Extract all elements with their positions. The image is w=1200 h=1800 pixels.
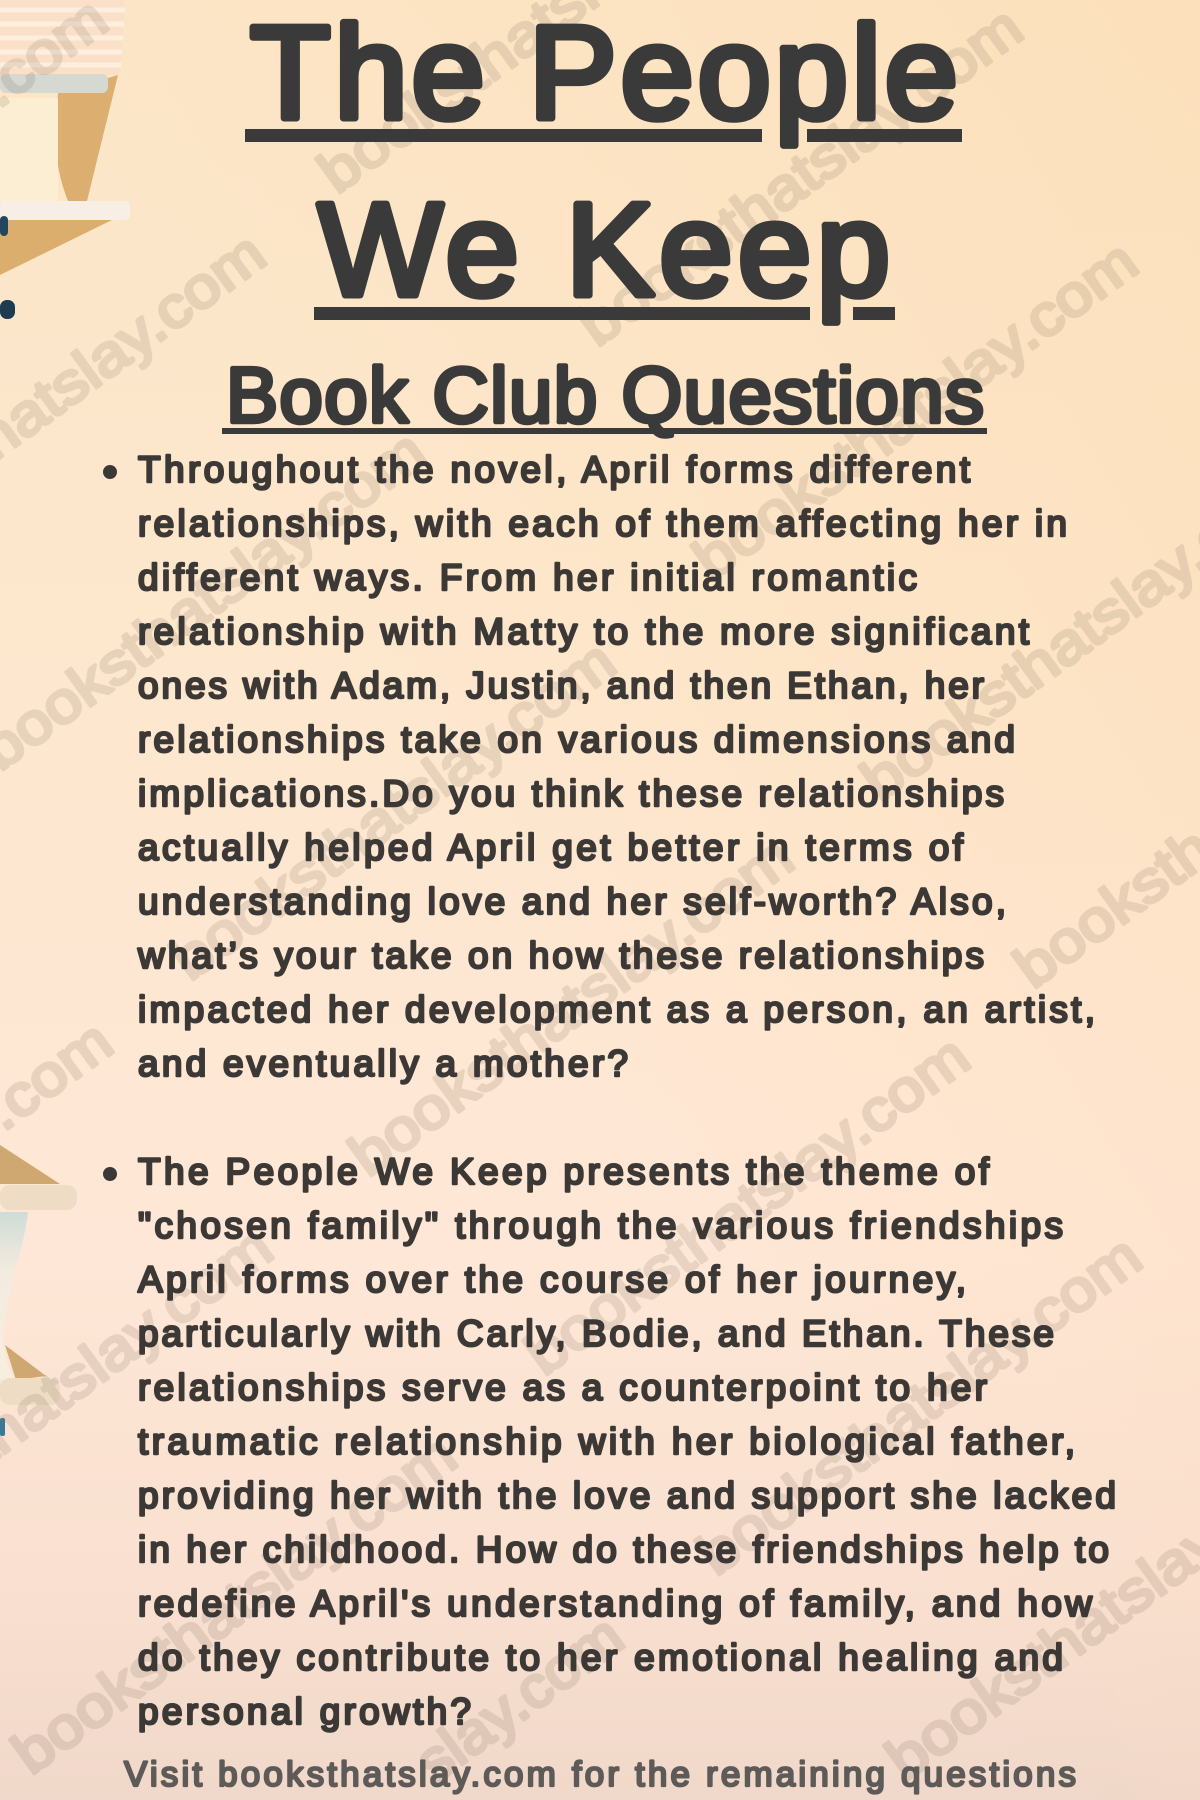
question 1 text: ones with Adam, Justin, and then Ethan, her bbox=[138, 665, 984, 706]
question 2 text: relationships serve as a counterpoint to her bbox=[138, 1367, 987, 1408]
question 1 text: relationships take on various dimensions and bbox=[138, 719, 1015, 760]
bullet bbox=[103, 1167, 117, 1181]
subtitle bbox=[222, 351, 987, 439]
title line 2: We Keep bbox=[318, 176, 890, 323]
watermark pattern: booksthatslay.com bbox=[513, 1023, 981, 1388]
question 1 text: impacted her development as a person, an artist, bbox=[138, 989, 1095, 1030]
title line 1: The People bbox=[250, 0, 958, 146]
question 1 text: and eventually a mother? bbox=[138, 1043, 628, 1084]
watermark pattern: booksthatslay.com bbox=[681, 228, 1149, 593]
question 2 text: in her childhood. How do these friendships help to bbox=[138, 1529, 1109, 1570]
question 1 bbox=[103, 449, 1095, 1084]
question 2 text: "chosen family" through the various friendships bbox=[138, 1205, 1063, 1246]
question 1 text: relationships, with each of them affecting her in bbox=[138, 503, 1067, 544]
question 2 bbox=[103, 1151, 1116, 1732]
question 2 text: April forms over the course of her journey, bbox=[138, 1259, 966, 1300]
question 1 text: relationship with Matty to the more significant bbox=[138, 611, 1030, 652]
decoration: book stack top left bbox=[0, 0, 130, 319]
question 2 text: do they contribute to her emotional healing and bbox=[138, 1637, 1063, 1678]
subtitle text: Book Club Questions bbox=[226, 351, 984, 439]
question 1 text: implications.Do you think these relationships bbox=[138, 773, 1004, 814]
title line 1 underline bbox=[245, 129, 962, 142]
watermark pattern: booksthatslay.com bbox=[685, 1223, 1153, 1588]
title bbox=[245, 0, 962, 323]
watermark pattern: slay.com bbox=[403, 1602, 635, 1796]
footer call to action: Visit booksthatslay.com for the remaining questions bbox=[124, 1755, 1076, 1794]
bullet bbox=[103, 465, 117, 479]
question 2 text: traumatic relationship with her biological father, bbox=[138, 1421, 1075, 1462]
question 1 text: what’s your take on how these relationships bbox=[137, 935, 984, 976]
question 1 text: understanding love and her self-worth? Also, bbox=[138, 881, 1006, 922]
subtitle underline bbox=[222, 428, 987, 434]
question 2 text: particularly with Carly, Bodie, and Ethan. These bbox=[138, 1313, 1054, 1354]
question 1 text: different ways. From her initial romantic bbox=[138, 557, 917, 598]
watermark pattern: booksthatslay.com bbox=[159, 628, 627, 993]
title line 2 underline bbox=[314, 307, 895, 320]
watermark pattern: booksthatslay.com bbox=[566, 0, 1034, 359]
question 1 text: actually helped April get better in terms of bbox=[138, 827, 964, 868]
question 1 text: Throughout the novel, April forms different bbox=[138, 449, 971, 490]
decoration: book stack lower left bbox=[0, 1145, 77, 1436]
question 2 text: redefine April's understanding of family, and how bbox=[138, 1583, 1092, 1624]
question 2 text: personal growth? bbox=[138, 1691, 471, 1732]
watermark pattern: booksthatslay.com bbox=[337, 824, 805, 1189]
question 1 text bbox=[137, 449, 1095, 1084]
question 2 text: The People We Keep presents the theme of bbox=[138, 1151, 990, 1192]
question 2 text: providing her with the love and support she lacked bbox=[138, 1475, 1116, 1516]
watermark pattern: booksthatslay.com bbox=[0, 1422, 468, 1787]
question 2 text bbox=[138, 1151, 1116, 1732]
